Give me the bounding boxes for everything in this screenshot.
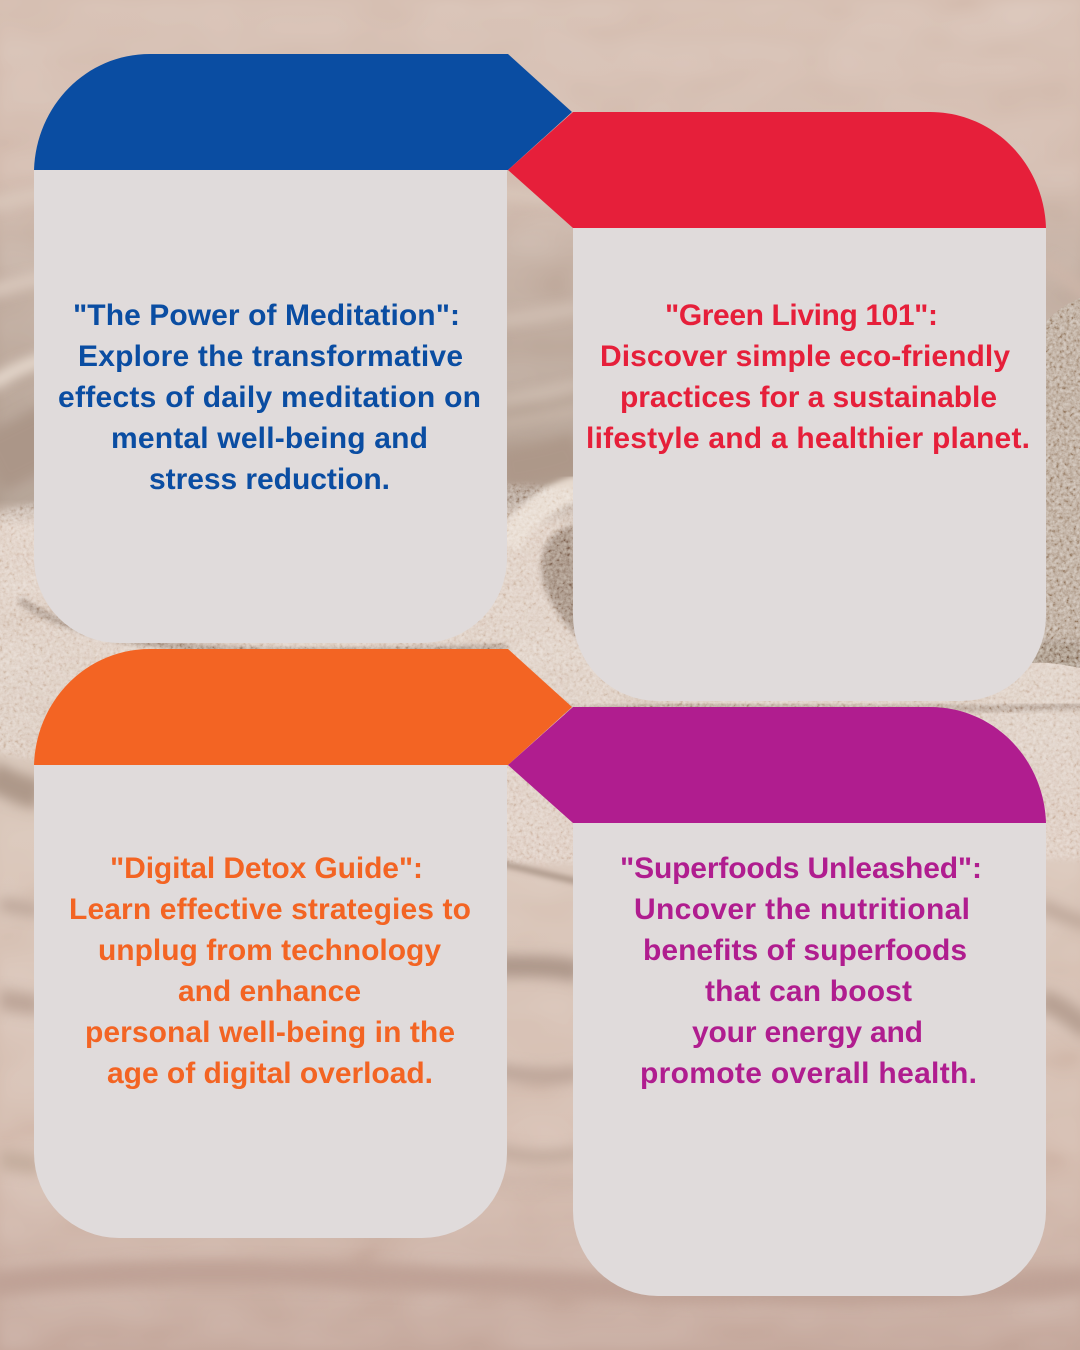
text block: practices for a sustainable — [620, 381, 997, 414]
text block: that can boost — [705, 975, 912, 1008]
text block: Learn effective strategies to — [69, 893, 471, 926]
panel header — [508, 112, 1046, 228]
panel: meditation — [34, 54, 572, 643]
panel body — [573, 823, 1046, 1296]
text block: unplug from technology — [98, 934, 441, 967]
text block — [69, 852, 471, 1090]
panel body — [34, 765, 507, 1238]
text block: personal well-being in the — [85, 1016, 455, 1049]
panel body — [34, 170, 507, 643]
icon: stone at right edge — [1032, 298, 1080, 668]
sand ridge with grain — [0, 476, 1080, 886]
text block: Discover simple eco-friendly — [600, 340, 1010, 373]
panel: digital detox — [34, 649, 572, 1238]
text block: age of digital overload. — [107, 1057, 433, 1090]
text block: "Superfoods Unleashed": — [620, 852, 982, 885]
text block: Uncover the nutritional — [634, 893, 970, 926]
text block: promote overall health. — [640, 1057, 977, 1090]
text block: mental well-being and — [111, 422, 428, 455]
text block — [620, 852, 982, 1090]
panel: superfoods — [508, 707, 1046, 1296]
panel header — [34, 54, 572, 170]
panel body — [573, 228, 1046, 701]
text block: lifestyle and a healthier planet. — [586, 422, 1030, 455]
panel header — [34, 649, 572, 765]
text block — [586, 299, 1030, 455]
text block: your energy and — [692, 1016, 923, 1049]
text block: stress reduction. — [149, 463, 390, 496]
text block: effects of daily meditation on — [58, 381, 481, 414]
text block: "Green Living 101": — [665, 299, 938, 332]
panel header — [508, 707, 1046, 823]
text block: Explore the transformative — [78, 340, 463, 373]
text block: benefits of superfoods — [643, 934, 967, 967]
text block — [58, 299, 481, 496]
panel: green living — [508, 112, 1046, 701]
text block: "Digital Detox Guide": — [110, 852, 423, 885]
text block: "The Power of Meditation": — [73, 299, 460, 332]
text block: and enhance — [178, 975, 361, 1008]
